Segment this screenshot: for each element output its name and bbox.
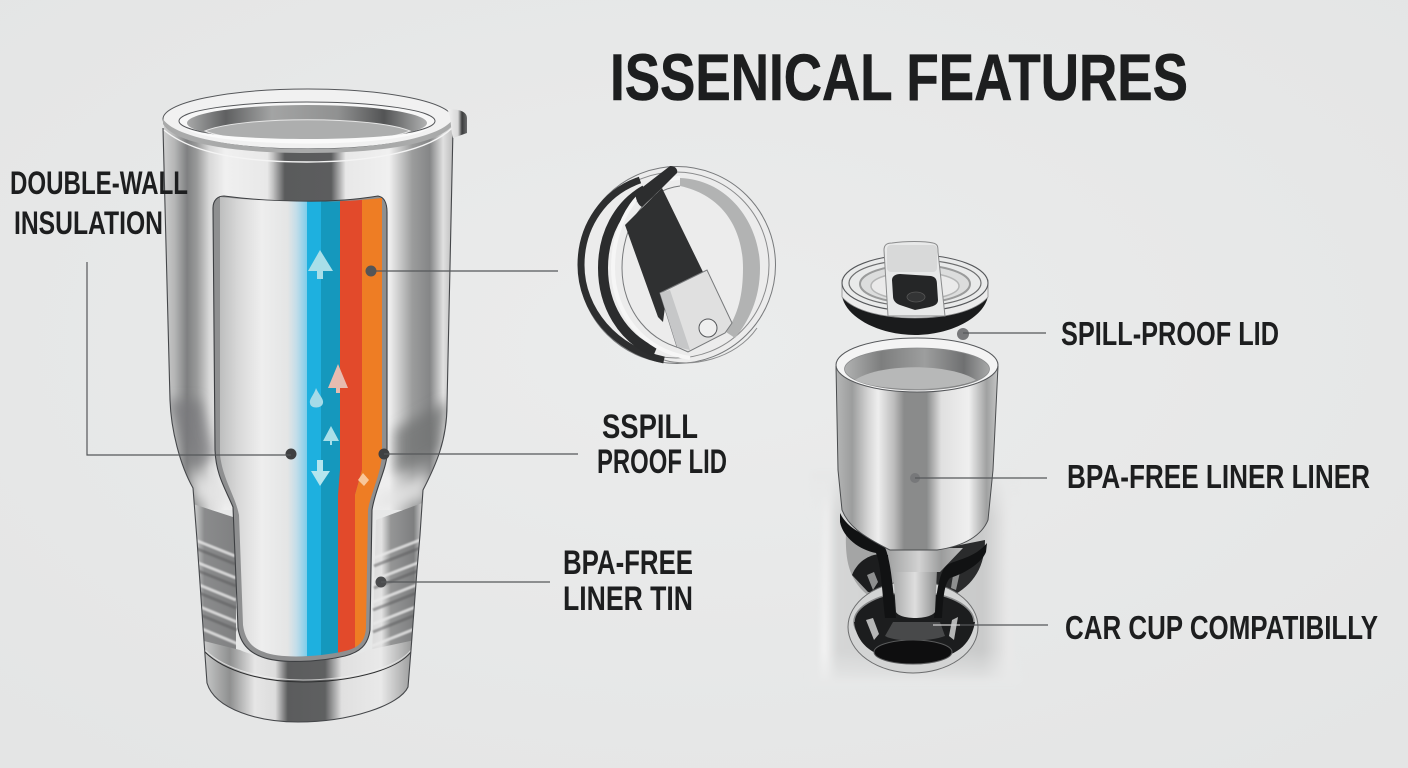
title: ISSENICAL FEATURES	[610, 40, 1188, 114]
leader dot: outer wall	[378, 448, 390, 460]
tumbler body	[160, 125, 460, 726]
arrow: up arrow red	[328, 364, 348, 393]
label: bpa-free liner tin: BPA-FREE	[563, 544, 693, 582]
arrow: up arrow upper	[308, 250, 333, 279]
leader dot: liner	[376, 576, 386, 588]
leader dot: hot wall	[366, 266, 376, 276]
tapered cup stem	[893, 570, 937, 618]
arrow: down arrow	[311, 460, 330, 486]
label: spill proof lid	[597, 408, 727, 481]
gripper arms	[840, 513, 896, 618]
label: double-wall insulation: INSULATION	[14, 205, 163, 241]
label: spill proof lid: SSPILL	[602, 408, 698, 446]
leader lines	[87, 262, 1048, 625]
lid flip tab	[884, 242, 945, 316]
flip cap metal latch	[660, 270, 732, 352]
label: double-wall insulation: DOUBLE-WALL	[10, 165, 188, 201]
exploded lid illustration	[578, 166, 776, 364]
right tumbler	[836, 338, 998, 550]
label: bpa-free liner tin: LINER TIN	[563, 580, 693, 618]
lid pull tab	[447, 109, 467, 138]
label: bpa-free liner tin	[563, 544, 693, 618]
large cutaway tumbler	[160, 89, 467, 726]
cup rim and interior	[836, 338, 998, 392]
leader dot: right liner	[910, 473, 920, 483]
lid rim	[163, 89, 467, 162]
tumbler outline	[163, 128, 453, 722]
label: spill proof lid: PROOF LID	[597, 443, 727, 481]
label: right spill-proof lid: SPILL-PROOF LID	[1061, 315, 1279, 352]
label: double-wall insulation	[10, 165, 188, 241]
right lid	[842, 242, 988, 340]
upper holder glass	[846, 530, 895, 600]
flip cap dark slider	[625, 188, 703, 322]
cutaway insulation window	[213, 190, 387, 670]
leader dot: inner wall	[286, 448, 296, 460]
leader dot: right lid	[957, 328, 969, 340]
arrow: small up arrow	[323, 426, 339, 445]
icon: droplet	[310, 388, 323, 408]
car cup holder	[810, 470, 1022, 685]
icon: small heat spark	[358, 473, 369, 486]
holder well	[848, 581, 978, 673]
